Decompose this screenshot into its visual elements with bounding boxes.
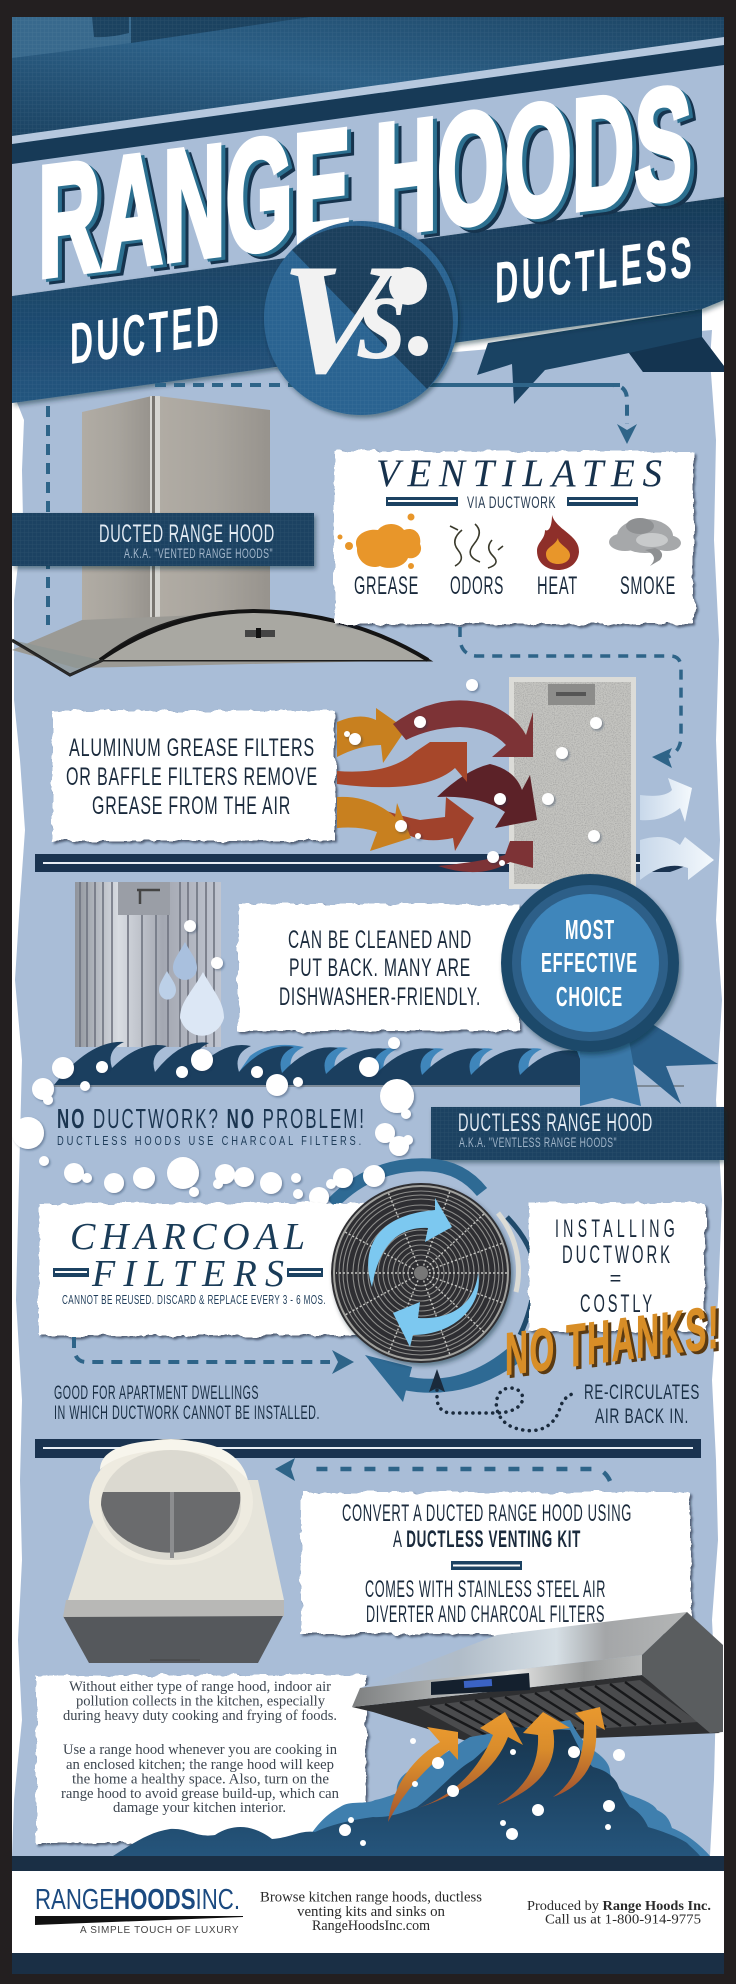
soap bubbles bbox=[12, 679, 602, 1207]
logo: Range Hoods Inc: A SIMPLE TOUCH OF LUXURY bbox=[80, 1925, 239, 1936]
panel: health paragraph: pollution collects in the kitchen, especially bbox=[76, 1694, 326, 1710]
text: browse: venting kits and sinks on bbox=[297, 1904, 446, 1920]
heading: no ductwork no problem: DUCTLESS HOODS USE CHARCOAL FILTERS. bbox=[57, 1133, 364, 1148]
header banner bbox=[12, 17, 724, 404]
separator bar two bbox=[35, 1439, 701, 1458]
panel: charcoal filters bbox=[39, 1203, 366, 1336]
recirculation ring arrow bbox=[332, 1165, 535, 1402]
waves bbox=[54, 1042, 684, 1087]
baffle filter bbox=[75, 882, 221, 1047]
panel: aluminum grease filters bbox=[53, 711, 335, 841]
labels: what is ventilated: SMOKE bbox=[620, 572, 676, 600]
panel: health paragraph: range hood to avoid grease build-up, which can bbox=[61, 1786, 340, 1802]
label: ductless range hood bbox=[431, 1107, 724, 1160]
footer band bottom bbox=[12, 1953, 724, 1974]
text: browse: Browse kitchen range hoods, ductless bbox=[260, 1890, 482, 1906]
panel: can be cleaned: DISHWASHER-FRIENDLY. bbox=[279, 983, 481, 1011]
panel: installing ductwork costly bbox=[529, 1203, 705, 1331]
stainless under-cabinet range hood bbox=[352, 1612, 723, 1743]
ribbon badge: most effective choice: EFFECTIVE bbox=[541, 947, 638, 978]
text: produced by bbox=[527, 1899, 711, 1928]
panel: can be cleaned: CAN BE CLEANED AND bbox=[288, 926, 472, 954]
heading: charcoal filters: FILTERS bbox=[91, 1253, 284, 1295]
air flow arrows bbox=[337, 700, 537, 872]
footer bbox=[12, 1871, 724, 1953]
panel: ventilates bbox=[334, 451, 694, 624]
icon: odors bbox=[450, 524, 503, 568]
steam dots bbox=[339, 1738, 625, 1846]
panel: convert a ducted range hood bbox=[301, 1492, 691, 1634]
text: apartment dwellings bbox=[54, 1383, 320, 1424]
panel: can be cleaned: PUT BACK. MANY ARE bbox=[289, 954, 471, 982]
icon: smoke bbox=[609, 518, 681, 566]
smoke cloud bbox=[113, 1720, 710, 1856]
subheading: via ductwork bbox=[386, 493, 638, 512]
ducted range hood photo bbox=[12, 396, 428, 675]
label: ductless range hood: A.K.A. "VENTLESS RANGE HOODS" bbox=[459, 1134, 617, 1150]
panel: health paragraph: during heavy duty cooking and frying of foods. bbox=[63, 1708, 337, 1724]
dotted arrow: recirculates bbox=[429, 1369, 576, 1431]
Vs circle: V bbox=[255, 231, 413, 406]
subtitle: Ducted: DUCTED bbox=[70, 292, 222, 377]
dashed arrow: top route to ventilates bbox=[48, 385, 637, 625]
panel: can be cleaned bbox=[238, 904, 520, 1031]
panel: installing ductwork costly: COSTLY bbox=[580, 1290, 655, 1318]
panel: health paragraph: the home a healthy space. Also, turn on the bbox=[72, 1772, 329, 1788]
label: ducted range hood: A.K.A. "VENTED RANGE HOODS" bbox=[124, 545, 273, 561]
torn blue background bbox=[12, 330, 722, 1856]
text: re-circulates air back in: AIR BACK IN. bbox=[595, 1405, 689, 1428]
text: apartment dwellings: IN WHICH DUCTWORK CANNOT BE INSTALLED. bbox=[54, 1403, 320, 1424]
Vs circle: s bbox=[357, 247, 407, 386]
panel: health paragraph: an enclosed kitchen; the range hood will keep bbox=[66, 1757, 334, 1773]
heading: charcoal filters: CHARCOAL bbox=[70, 1216, 305, 1258]
panel: aluminum grease filters: GREASE FROM THE AIR bbox=[92, 792, 291, 820]
subheading: via ductwork: VIA DUCTWORK bbox=[467, 493, 556, 512]
labels: what is ventilated: ODORS bbox=[450, 572, 504, 600]
rising air arrows bbox=[388, 1707, 605, 1822]
heading: no ductwork no problem bbox=[57, 1103, 366, 1148]
arrows: clean air out bbox=[640, 778, 714, 880]
panel: aluminum grease filters: OR BAFFLE FILTERS REMOVE bbox=[66, 763, 318, 791]
ribbon badge: most effective choice: MOST bbox=[565, 914, 615, 945]
panel: convert a ducted range hood: A DUCTLESS VENTING KIT bbox=[393, 1526, 581, 1553]
text: re-circulates air back in bbox=[584, 1381, 700, 1428]
panel: health paragraph: Without either type of range hood, indoor air bbox=[69, 1679, 331, 1695]
heading: charcoal filters bbox=[53, 1216, 323, 1295]
dashed arrow: charcoal to apartment note bbox=[74, 1337, 354, 1374]
text: produced by: Produced by Range Hoods Inc. bbox=[527, 1899, 711, 1914]
panel: health paragraph bbox=[36, 1675, 366, 1843]
icon: grease bbox=[338, 514, 421, 569]
text: browse: RangeHoodsInc.com bbox=[312, 1918, 431, 1934]
note: cannot be reused: CANNOT BE REUSED. DISCARD & REPLACE EVERY 3 - 6 MOS. bbox=[62, 1292, 326, 1307]
text: browse bbox=[260, 1890, 482, 1934]
charcoal filter disc bbox=[331, 1183, 518, 1363]
icon: heat flame bbox=[537, 515, 579, 570]
dashed arrow: to kit bbox=[275, 1458, 610, 1481]
dashed arrow: ventilates to filter bbox=[460, 627, 681, 768]
footer band top bbox=[12, 1856, 724, 1871]
ductless venting kit photo bbox=[63, 1439, 284, 1663]
logo: Range Hoods Inc bbox=[35, 1884, 243, 1936]
ribbon badge: most effective choice bbox=[501, 874, 718, 1106]
label: ducted range hood bbox=[12, 513, 314, 566]
logo: Range Hoods Inc: RANGEHOODSINC. bbox=[35, 1884, 240, 1916]
panel: installing ductwork costly: = bbox=[610, 1268, 622, 1290]
panel: health paragraph: damage your kitchen interior. bbox=[113, 1800, 286, 1816]
ribbon badge: most effective choice: CHOICE bbox=[556, 981, 623, 1012]
aluminum mesh filter bbox=[509, 677, 636, 889]
label: ducted range hood: DUCTED RANGE HOOD bbox=[99, 520, 275, 548]
labels: what is ventilated bbox=[354, 572, 676, 600]
panel: aluminum grease filters: ALUMINUM GREASE FILTERS bbox=[69, 734, 315, 762]
separator bar one bbox=[35, 854, 688, 872]
panel: health paragraph: Use a range hood whenever you are cooking in bbox=[63, 1742, 338, 1758]
icon: water drops bbox=[159, 942, 224, 1036]
text: produced by: Call us at 1-800-914-9775 bbox=[545, 1912, 701, 1928]
heading: no ductwork no problem: NO DUCTWORK? NO PROBLEM! bbox=[57, 1103, 366, 1134]
labels: what is ventilated: GREASE bbox=[354, 572, 419, 600]
text: apartment dwellings: GOOD FOR APARTMENT DWELLINGS bbox=[54, 1383, 259, 1404]
labels: what is ventilated: HEAT bbox=[537, 572, 578, 600]
heading: ventilates: VENTILATES bbox=[376, 452, 662, 495]
